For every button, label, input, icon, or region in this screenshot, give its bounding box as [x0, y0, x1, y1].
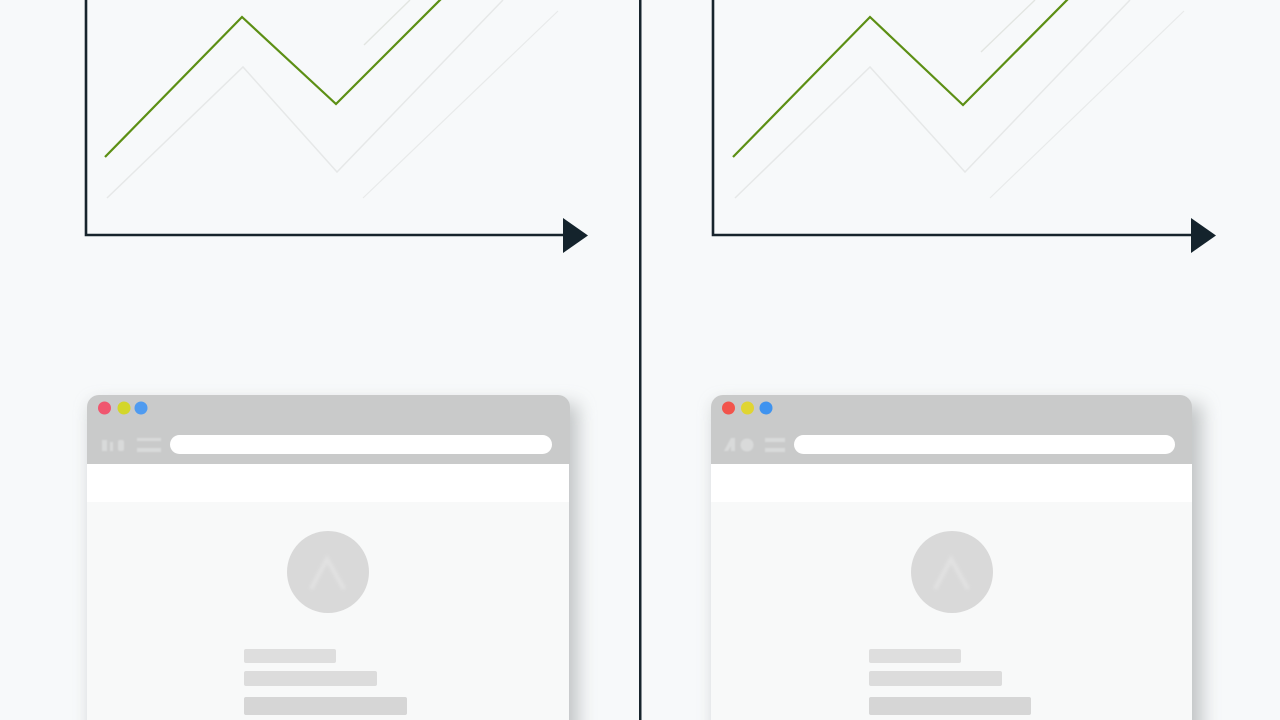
right avatar chevron	[935, 559, 968, 589]
left content bar 1	[244, 649, 336, 663]
left window button blue	[134, 402, 148, 414]
left window button red	[98, 402, 111, 414]
center divider	[639, 0, 642, 720]
left chart arrowhead	[563, 218, 588, 253]
left chart axes	[86, 0, 566, 235]
right address bar	[794, 435, 1175, 454]
right chart arrowhead	[1191, 218, 1216, 253]
right chart faded lower line	[990, 11, 1184, 198]
left chart faded lower line	[363, 11, 558, 198]
left browser page body	[87, 502, 569, 720]
panel: right browser window	[711, 395, 1202, 720]
left chart green line	[105, 0, 442, 157]
right chart faded middle line	[735, 0, 1130, 198]
left chart faded middle line	[107, 0, 503, 198]
right browser shadow	[716, 404, 1202, 720]
right nav icons	[724, 438, 785, 452]
left content bar 3	[244, 697, 407, 715]
panel: left chart	[86, 0, 588, 253]
left avatar chevron	[311, 559, 344, 589]
right window button red	[722, 402, 735, 414]
right window button blue	[760, 402, 772, 414]
right chart faded upper line	[981, 0, 1035, 52]
right window button yellow	[741, 402, 754, 414]
left browser title bar	[87, 395, 570, 464]
right content bar 3	[869, 697, 1031, 715]
left nav icons	[102, 438, 161, 452]
left content bar 2	[244, 671, 377, 686]
right avatar circle	[911, 531, 993, 613]
left browser shadow	[92, 404, 578, 720]
right content bar 2	[869, 671, 1002, 686]
left avatar circle	[287, 531, 369, 613]
right content bar 1	[869, 649, 961, 663]
right browser title bar	[711, 395, 1192, 464]
panel: right chart	[713, 0, 1216, 253]
right chart axes	[713, 0, 1194, 235]
right chart green line	[733, 0, 1069, 157]
right browser white strip	[711, 464, 1192, 502]
left browser white strip	[87, 464, 569, 502]
left window button yellow	[118, 402, 130, 414]
left address bar	[170, 435, 552, 454]
right browser page body	[711, 502, 1192, 720]
left chart faded upper line	[364, 0, 410, 45]
panel: left browser window	[87, 395, 578, 720]
